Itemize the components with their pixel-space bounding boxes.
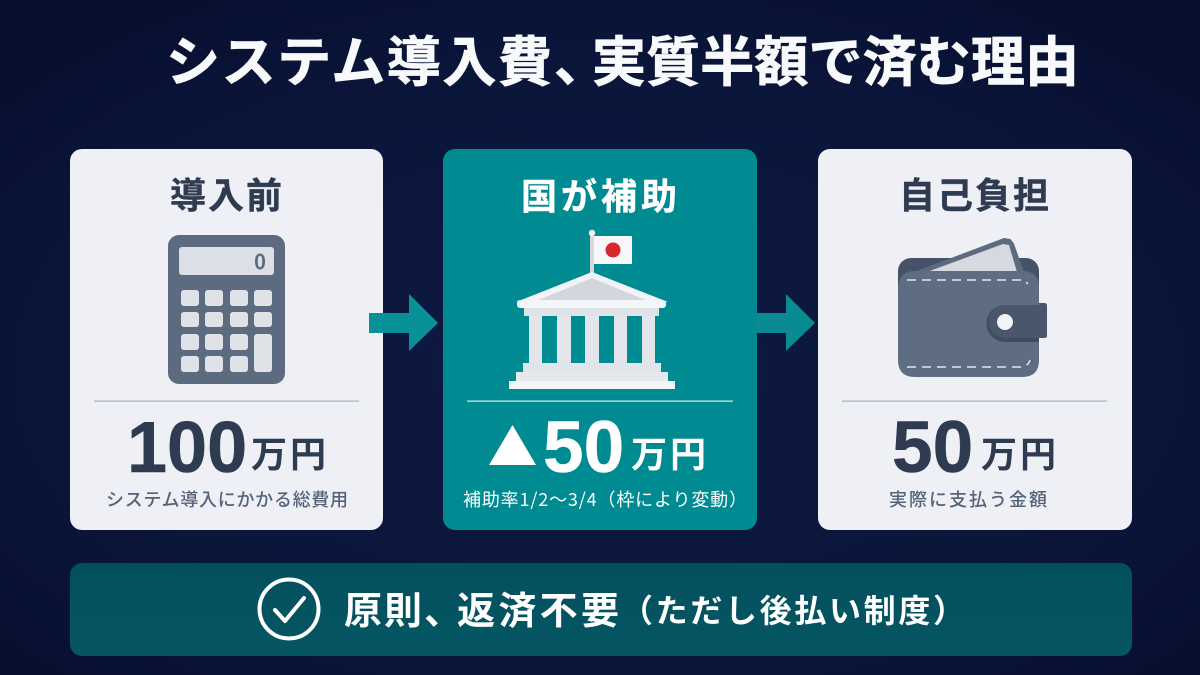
caption: subsidy rate: 補助率1/2～3/4（枠により変動） xyxy=(463,486,747,512)
banner text: main: 原則 xyxy=(344,591,422,633)
amount: minus 50万円 xyxy=(489,407,706,488)
heading: before: 導入前 xyxy=(170,175,284,216)
icon: government building with flag xyxy=(509,230,675,389)
caption: total cost: システム導入にかかる総費用 xyxy=(106,490,348,510)
title: システム導入費 xyxy=(166,33,552,93)
icon: check mark in circle xyxy=(260,580,318,638)
amount: 50万円: 万円 xyxy=(981,434,1056,475)
arrow: subsidy to self-pay xyxy=(757,294,815,351)
title: 、 xyxy=(554,33,608,93)
icon: calculator xyxy=(168,235,285,384)
banner text: main: 、 xyxy=(424,591,462,633)
amount: 50万円 xyxy=(892,407,1056,488)
amount: 100万円 xyxy=(127,408,326,488)
icon: calculator: 0 xyxy=(254,246,266,275)
arrow: before to subsidy xyxy=(369,294,438,351)
banner text: note: （ただし後払い制度） xyxy=(621,593,965,629)
caption: actual payment: 実際に支払う金額 xyxy=(889,490,1047,510)
banner text: main: 返済不要 xyxy=(457,591,619,633)
amount: 100万円: 万円 xyxy=(251,434,326,475)
amount: 50万円: 50 xyxy=(892,407,973,488)
title: 実質半額で済む理由 xyxy=(592,33,1079,93)
banner: no repayment xyxy=(70,563,1132,656)
amount: 100万円: 100 xyxy=(127,408,247,488)
heading: subsidy: 国が補助 xyxy=(521,176,681,217)
amount: minus 50万円: 万円 xyxy=(631,434,706,475)
heading: self-pay: 自己負担 xyxy=(899,175,1051,216)
icon: wallet xyxy=(898,239,1047,377)
amount: minus 50万円: 50 xyxy=(543,407,624,488)
panel: self-pay xyxy=(818,149,1132,530)
panel: government subsidy xyxy=(443,149,757,530)
panel: before introduction xyxy=(70,149,383,530)
